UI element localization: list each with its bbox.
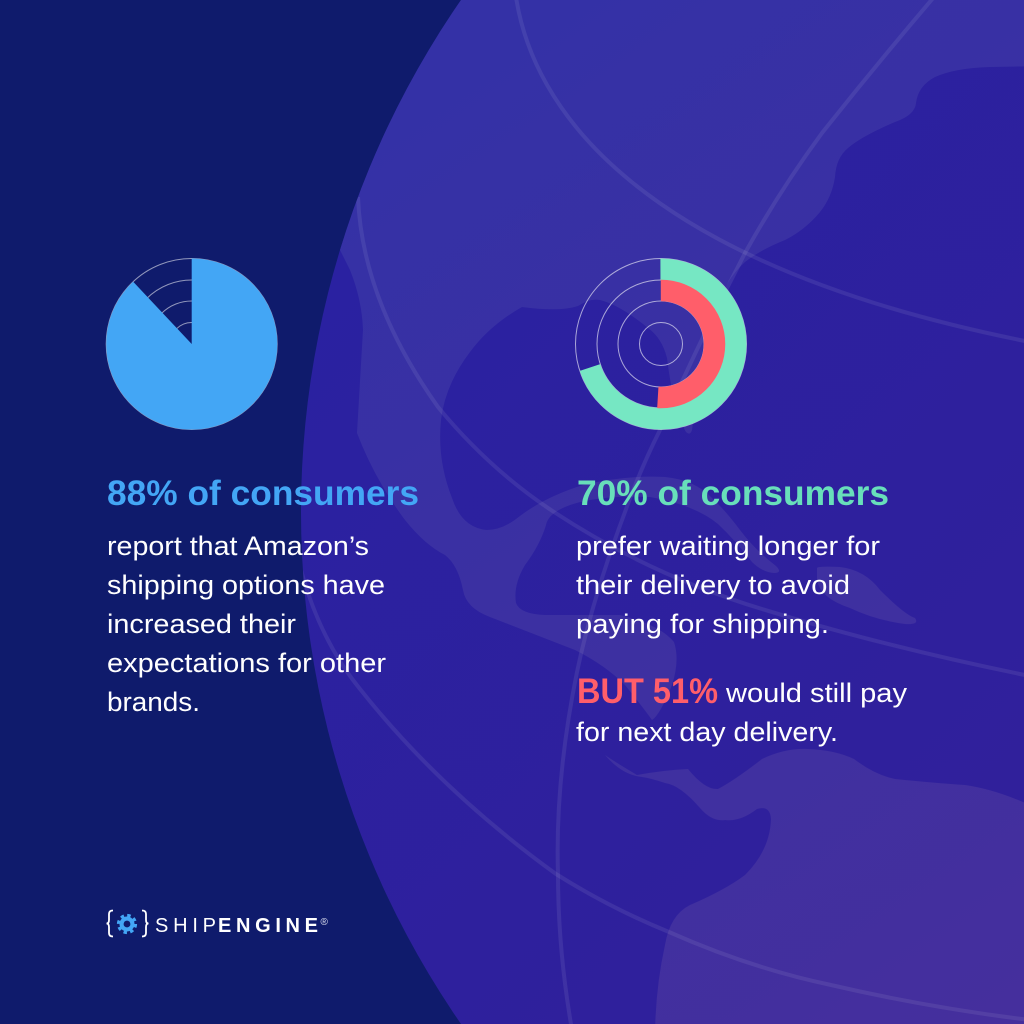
land: island — [817, 567, 916, 624]
wordmark: ® — [320, 917, 328, 928]
pie chart: 88% — [106, 258, 277, 430]
text block: Amazon shipping expectations: brands. — [107, 687, 200, 717]
callout: BUT 51%: for next day delivery. — [576, 717, 838, 747]
text block: Amazon shipping expectations — [107, 531, 386, 717]
land: north america — [300, 0, 1024, 720]
text block: waiting longer — [576, 531, 880, 639]
heading: 70% of consumers: 70% of consumers — [577, 474, 889, 513]
land: south america — [605, 749, 1024, 1024]
heading: 88% of consumers: 88% of consumers — [107, 474, 419, 513]
ring chart: 70% and 51% — [576, 258, 746, 430]
text block: waiting longer: their delivery to avoid — [576, 570, 850, 600]
globe grid lines — [301, 0, 1024, 1024]
wordmark — [155, 915, 328, 937]
callout: BUT 51% — [576, 672, 908, 747]
wordmark: ENGINE — [218, 915, 318, 937]
globe ocean — [290, 0, 1024, 1024]
wordmark: SHIP — [155, 915, 216, 937]
callout: BUT 51%: BUT 51% — [577, 672, 718, 711]
text block: Amazon shipping expectations: increased their — [107, 609, 296, 639]
text block: Amazon shipping expectations: expectations for other — [107, 648, 386, 678]
text block: Amazon shipping expectations: report that Amazon’s — [107, 531, 369, 561]
panel: Amazon expectations statistic — [106, 258, 419, 717]
logo: ShipEngine — [106, 910, 328, 937]
globe illustration — [290, 0, 1024, 1024]
text block: waiting longer: prefer waiting longer for — [576, 531, 880, 561]
text block: Amazon shipping expectations: shipping options have — [107, 570, 385, 600]
icon: braces and gear — [106, 910, 148, 936]
callout: BUT 51%: would still pay — [725, 678, 908, 708]
panel: delivery preference statistic — [576, 258, 908, 747]
text block: waiting longer: paying for shipping. — [576, 609, 829, 639]
